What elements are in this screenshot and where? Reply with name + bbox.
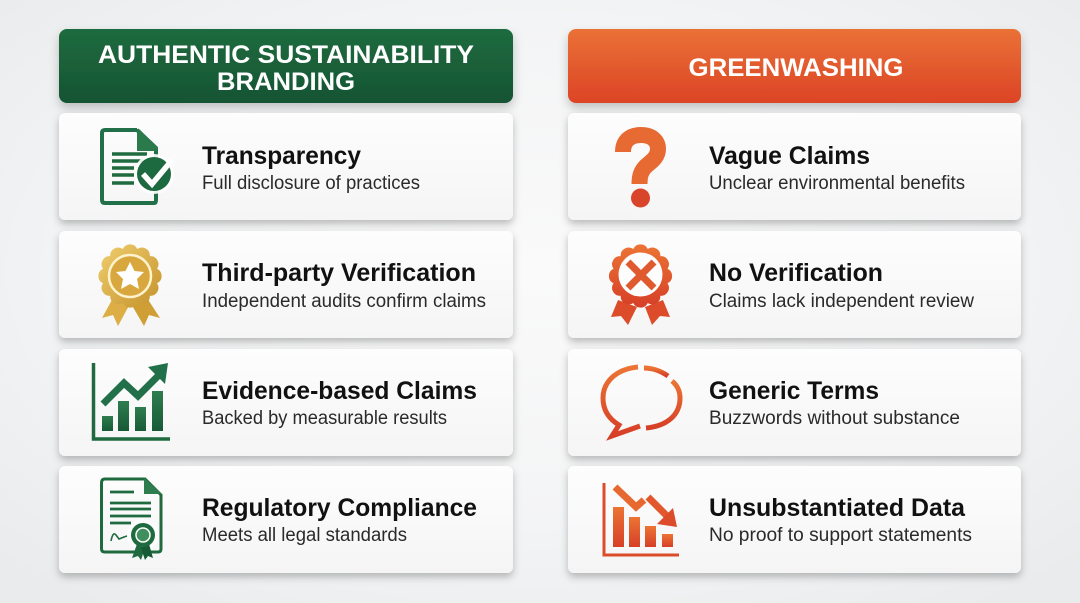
header: greenwashing — [568, 29, 1021, 103]
text: regulatory compliance: Regulatory Compliance — [202, 494, 477, 522]
text: evidence-based claims: Evidence-based Claims — [202, 377, 477, 405]
panel: evidence-based claims — [59, 349, 513, 456]
text: transparency: Transparency — [202, 142, 361, 170]
panel: unsubstantiated data — [568, 466, 1021, 573]
text: unsubstantiated data — [709, 494, 972, 546]
text: third-party verification: Third-party Verification — [202, 259, 476, 287]
header: authentic sustainability branding: AUTHENTIC SUSTAINABILITY — [98, 41, 474, 69]
icon: question mark — [623, 135, 658, 208]
text: generic terms: Generic Terms — [709, 377, 879, 405]
icon: document with check — [102, 129, 174, 203]
text: evidence-based claims: Backed by measurable results — [202, 408, 447, 429]
header: greenwashing: GREENWASHING — [688, 54, 904, 82]
text: vague claims: Unclear environmental benefits — [709, 173, 965, 194]
text: vague claims: Vague Claims — [709, 142, 870, 170]
icon: badge with x — [609, 244, 672, 325]
text: generic terms — [709, 377, 960, 429]
panel: third-party verification — [59, 231, 513, 338]
text: unsubstantiated data: No proof to support statements — [709, 525, 972, 546]
text: vague claims — [709, 142, 965, 194]
panel: transparency — [59, 113, 513, 220]
text: regulatory compliance: Meets all legal standards — [202, 525, 407, 546]
panel: regulatory compliance — [59, 466, 513, 573]
text: third-party verification: Independent audits confirm claims — [202, 291, 486, 312]
text: generic terms: Buzzwords without substance — [709, 408, 960, 429]
text: transparency — [202, 142, 420, 194]
icon: broken speech bubble — [603, 367, 680, 436]
text: unsubstantiated data: Unsubstantiated Data — [709, 494, 966, 522]
icon: gold award badge — [98, 244, 162, 326]
text: transparency: Full disclosure of practices — [202, 173, 420, 194]
header: authentic sustainability branding: BRANDING — [217, 68, 355, 96]
text: regulatory compliance — [202, 494, 477, 546]
text: no verification — [709, 259, 974, 312]
panel: vague claims — [568, 113, 1021, 220]
icon: certificate document — [102, 478, 162, 560]
text: no verification: Claims lack independent review — [709, 291, 974, 312]
text: no verification: No Verification — [709, 259, 883, 287]
panel: no verification — [568, 231, 1021, 338]
panel: generic terms — [568, 349, 1021, 456]
text: third-party verification — [202, 259, 486, 312]
icon: rising bar chart — [94, 363, 170, 439]
header: authentic sustainability branding — [59, 29, 513, 103]
icon: falling bar chart — [604, 483, 679, 555]
text: evidence-based claims — [202, 377, 477, 429]
